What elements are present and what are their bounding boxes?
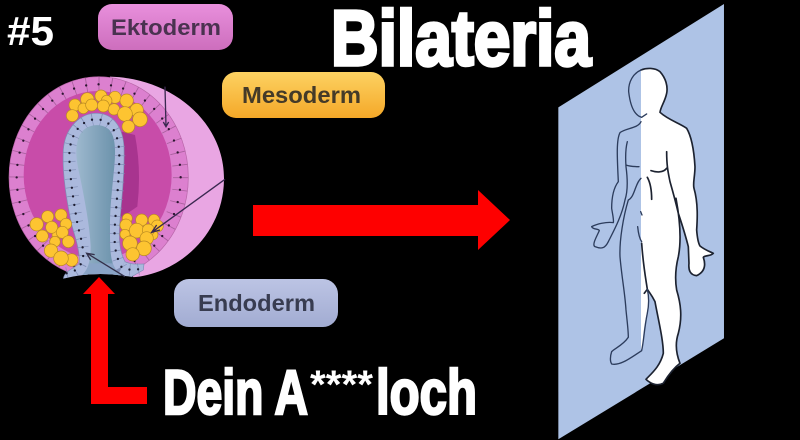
endoderm cell dividers [67, 119, 142, 273]
label: Ektoderm: Ektoderm [111, 15, 221, 40]
outer light pink cavity wall [100, 77, 224, 277]
arrow: pointing to blastopore [83, 277, 147, 404]
inner mesoderm cavity [24, 91, 172, 259]
mesoderm cells: top cluster [66, 90, 147, 133]
caption: Dein A [163, 358, 308, 428]
mesoderm cells: lower left cluster [30, 209, 78, 266]
dark cavity fold [120, 132, 139, 218]
archenteron lumen [76, 125, 120, 276]
endoderm tube [63, 113, 144, 279]
body left half outline [592, 70, 649, 364]
pointer: ectoderm [163, 87, 169, 127]
endoderm cell nuclei [67, 119, 142, 273]
ectoderm cell nuclei [17, 84, 181, 270]
caption: loch [376, 358, 477, 428]
pointer: mesoderm [152, 179, 225, 232]
label: Ektoderm [98, 4, 233, 50]
diagram: gastrula embryo [9, 77, 225, 279]
arrow: embryo to body plane [253, 190, 510, 250]
sagittal plane [558, 4, 724, 439]
lumen opening [82, 264, 122, 276]
label: Mesoderm [222, 72, 385, 118]
pointer: endoderm [87, 253, 125, 277]
mesoderm cells: lower right cluster [120, 213, 163, 261]
diagram: body on symmetry plane [558, 4, 724, 439]
ectoderm ring [9, 77, 188, 278]
badge: #5: #5 [7, 8, 54, 54]
caption [163, 358, 477, 428]
body outline [641, 68, 713, 385]
label: Endoderm: Endoderm [198, 290, 315, 316]
body right half, white fill [641, 68, 713, 385]
ectoderm cell dividers [17, 84, 181, 270]
label: Mesoderm: Mesoderm [242, 82, 361, 108]
label: Endoderm [174, 279, 338, 327]
caption: **** [310, 363, 373, 407]
